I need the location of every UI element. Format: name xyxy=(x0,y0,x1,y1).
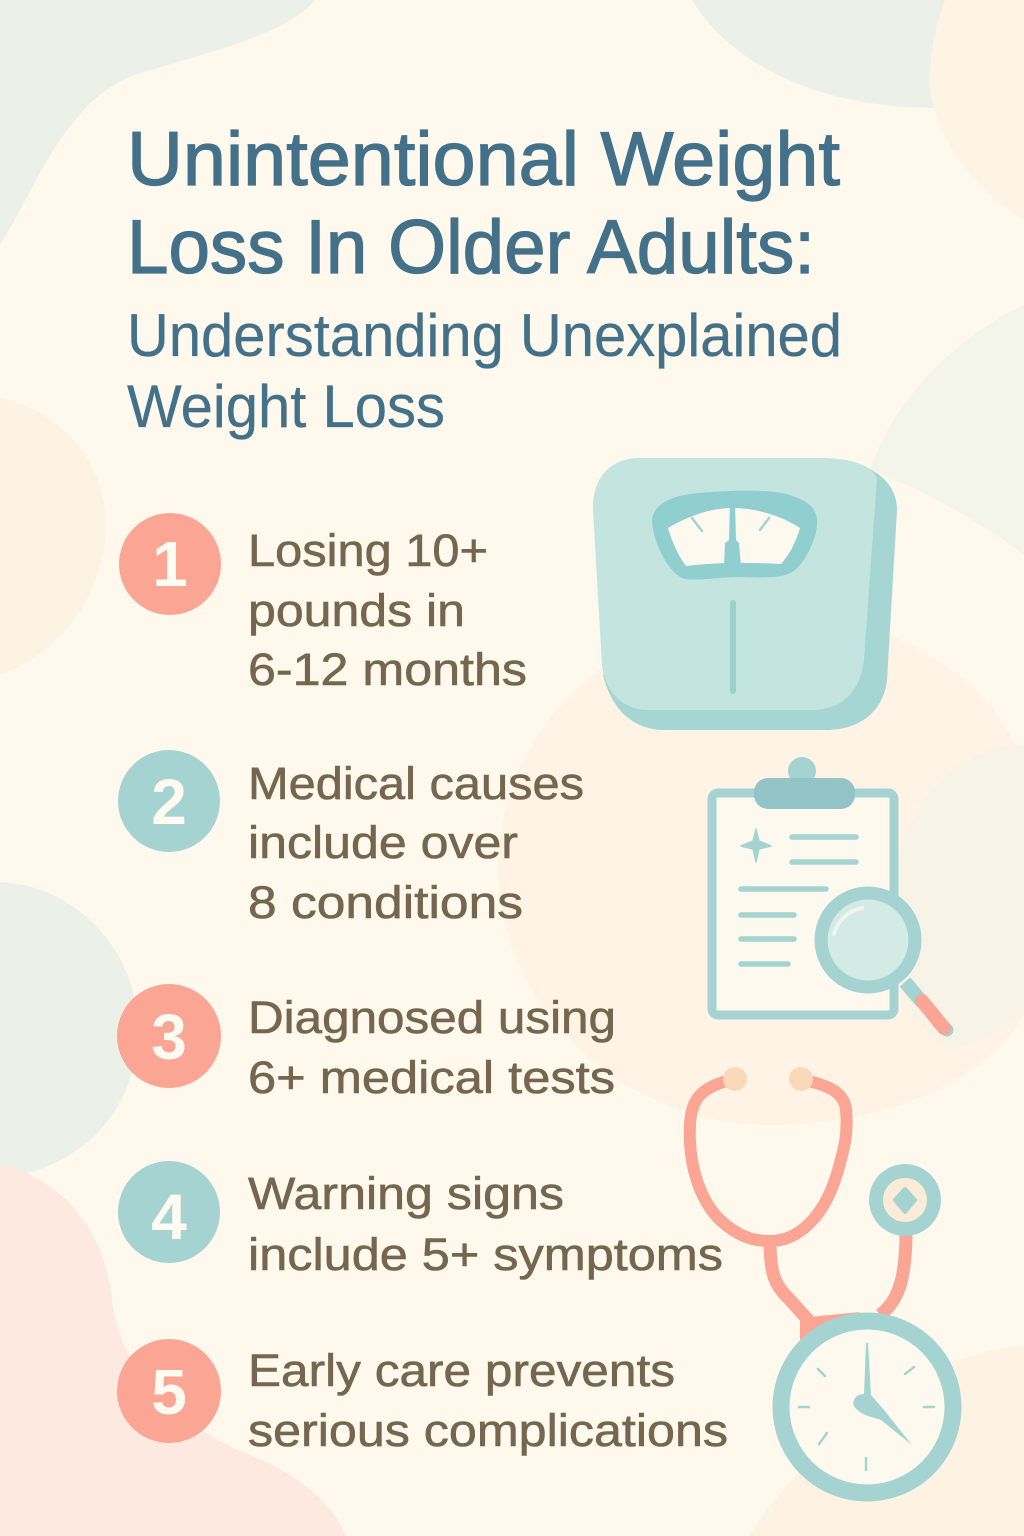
step 1 xyxy=(119,513,527,695)
text 5: serious complications xyxy=(248,1405,728,1456)
text 2: include over xyxy=(248,817,518,868)
text 4: Warning signs xyxy=(248,1168,564,1219)
text 1 xyxy=(248,525,527,695)
step 2 xyxy=(118,750,584,928)
text 2: 8 conditions xyxy=(248,877,523,928)
text 3: Diagnosed using xyxy=(248,992,616,1043)
text 1: Losing 10+ xyxy=(248,525,488,576)
text 5 xyxy=(248,1345,728,1456)
text 5: Early care prevents xyxy=(248,1345,675,1396)
text 3 xyxy=(248,992,616,1103)
title xyxy=(127,117,840,290)
title: Loss In Older Adults: xyxy=(127,205,815,290)
badge 1 xyxy=(119,513,221,615)
badge 2: 2 xyxy=(151,766,187,838)
magnifier xyxy=(821,893,947,1030)
badge 3 xyxy=(117,984,221,1088)
text 1: 6-12 months xyxy=(248,644,527,695)
badge 1: 1 xyxy=(152,528,188,600)
icon: stethoscope xyxy=(690,1067,941,1340)
text 1: pounds in xyxy=(248,585,465,636)
step 4 xyxy=(118,1161,723,1280)
badge 4: 4 xyxy=(151,1181,187,1253)
icon: clipboard with magnifier xyxy=(712,757,947,1030)
text 2: Medical causes xyxy=(248,758,584,809)
step 5 xyxy=(117,1339,728,1456)
subtitle xyxy=(127,302,842,440)
text 4 xyxy=(248,1168,723,1280)
subtitle: Weight Loss xyxy=(127,373,445,440)
badge 3: 3 xyxy=(151,1001,187,1073)
text 2 xyxy=(248,758,584,928)
title: Unintentional Weight xyxy=(127,117,840,202)
badge 5: 5 xyxy=(151,1356,187,1428)
text 4: include 5+ symptoms xyxy=(248,1229,723,1280)
icon: weighing scale xyxy=(593,458,897,730)
step 3 xyxy=(117,984,616,1103)
text 3: 6+ medical tests xyxy=(248,1052,615,1103)
badge 4 xyxy=(118,1161,220,1263)
subtitle: Understanding Unexplained xyxy=(127,302,842,369)
icon: clock xyxy=(781,1321,953,1493)
badge 2 xyxy=(118,750,220,852)
badge 5 xyxy=(117,1339,221,1443)
